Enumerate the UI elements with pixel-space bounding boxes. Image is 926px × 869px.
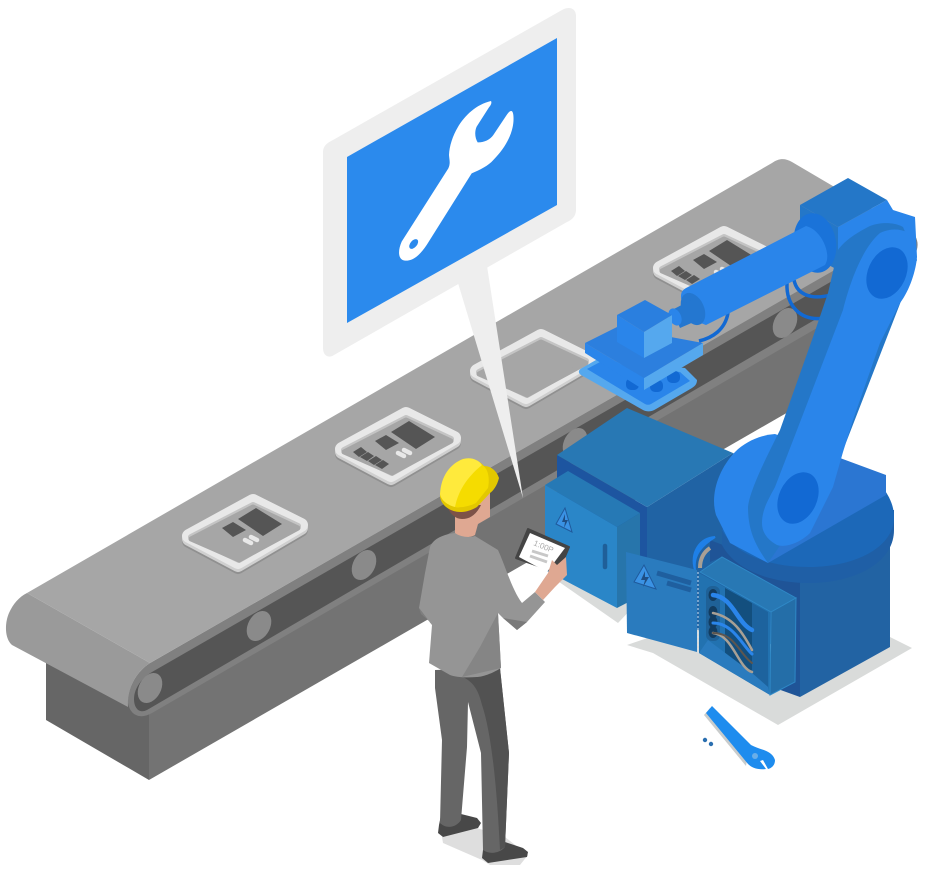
conveyor: top surface: [27, 159, 906, 663]
small cabinet: right face: [617, 513, 640, 608]
worker: hair: [447, 505, 481, 519]
tablet: time text: 1:00P: [532, 539, 555, 555]
bubble: tail: [458, 266, 523, 498]
worker: helmet: [440, 458, 499, 512]
panel: left inner wall: [699, 573, 770, 695]
empty tray 3: [477, 336, 589, 402]
panel: right face: [770, 598, 796, 695]
large control cabinet: [557, 408, 800, 650]
gripper: upper plate: [585, 343, 644, 390]
wrench: body: [706, 706, 775, 769]
ground shadow: robot cabinets: [552, 575, 912, 725]
worker: tablet: [516, 529, 569, 573]
worker: [419, 458, 569, 865]
robot arm lower joint: [714, 434, 886, 563]
bubble: frame: [323, 8, 576, 357]
base: left face: [710, 540, 800, 697]
open cabinet door: [626, 552, 697, 652]
conveyor: far end cap: [880, 225, 918, 280]
circuit board tray 2: [342, 414, 454, 480]
arm: dark edge: [748, 223, 917, 563]
panel: top face: [700, 557, 796, 612]
cabinet: right face: [647, 453, 800, 650]
cylinder: collar: [789, 210, 841, 276]
panel: hinge: [697, 572, 699, 653]
robot forearm cylinder: [666, 210, 841, 329]
panel: terminal holes: [708, 589, 718, 638]
conveyor: base front face: [149, 320, 830, 780]
worker: torso and arm: [419, 533, 545, 677]
worker: ground shadow: [442, 828, 528, 865]
robot base box: [710, 515, 890, 697]
worker: pants: [435, 668, 509, 853]
small cabinet: front face: [545, 485, 617, 608]
circuit board tray 4: [660, 233, 772, 299]
door: label lines: [657, 573, 691, 590]
conveyor: side band: [128, 232, 900, 716]
cylinder: body: [681, 226, 827, 325]
worker: shirt shading: [462, 613, 501, 677]
tablet: text lines: [530, 551, 548, 562]
speech bubble: [323, 8, 576, 498]
panel: wires: [713, 595, 752, 672]
robot rotating disc: [722, 470, 894, 583]
worker: hand and forearm: [535, 557, 567, 600]
arm: upper block left: [800, 205, 838, 270]
worker: right shoe: [482, 842, 528, 863]
icon: door high voltage triangle: [634, 565, 656, 589]
panel: terminal strip: [706, 586, 720, 641]
gripper: pins: [626, 371, 680, 392]
base: right face: [800, 515, 890, 697]
panel: side wall: [752, 603, 768, 687]
cylinder: end cap: [676, 289, 710, 329]
cylinder: neck: [672, 298, 703, 328]
small cabinet: door handle: [603, 546, 607, 567]
joint: bright hub: [714, 434, 840, 563]
arm: upper block top: [800, 178, 887, 227]
gripper: cube: [617, 315, 644, 358]
dropped wrench: [703, 706, 775, 769]
robot cables behind arm: [699, 280, 830, 341]
joint: shaded face: [768, 458, 886, 563]
gripper: bottom plate: [579, 360, 697, 411]
small cabinet: top face: [545, 471, 640, 527]
robot arm: [748, 178, 917, 563]
cabinet: top face: [557, 408, 733, 507]
wrench: shadow: [704, 708, 749, 766]
conveyor: base left face: [46, 650, 149, 780]
conveyor: rounded end: [6, 593, 150, 707]
bubble: blue screen: [347, 38, 557, 323]
arm: lower pivot hole: [769, 465, 827, 531]
conveyor belt: [6, 159, 918, 780]
panel: back wall: [725, 588, 752, 673]
panel: floor: [699, 640, 770, 695]
wrench: small screws: [703, 738, 713, 746]
worker: pants shading: [458, 668, 509, 850]
worker: neck and head: [455, 490, 490, 537]
conveyor: rollers: [133, 304, 802, 707]
arm: bright body: [762, 230, 917, 546]
panel: curved external cables: [700, 548, 710, 568]
cabinet: left face: [557, 455, 647, 600]
arm: upper block right: [838, 200, 917, 300]
conveyor: dark belt: [134, 242, 900, 711]
icon: high voltage triangle: [556, 508, 572, 532]
icon: white wrench: [399, 101, 514, 261]
robot gripper: [579, 300, 703, 411]
small electrical cabinet: [545, 471, 640, 608]
wiring panel box: [694, 537, 796, 695]
circuit board tray 1: [189, 501, 301, 567]
worker: sleeve underside: [503, 618, 527, 630]
wrench: hole: [752, 753, 758, 759]
arm: upper pivot hole: [858, 240, 916, 306]
worker: left shoe: [438, 814, 481, 837]
